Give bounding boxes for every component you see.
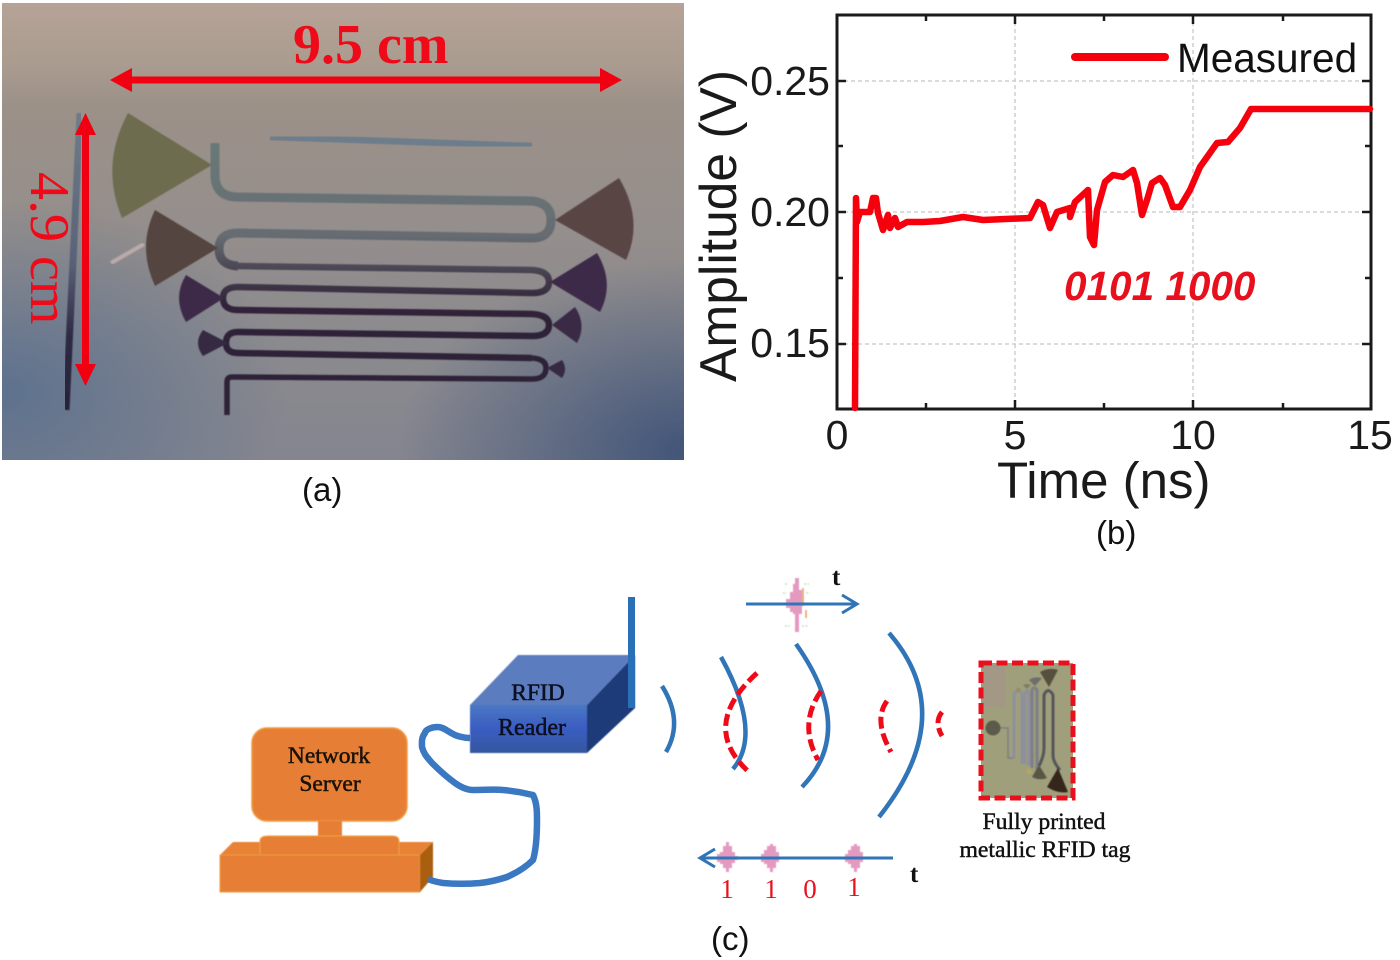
RFID reader box (470, 655, 635, 753)
reader label: RFID (511, 680, 565, 706)
server label: Network (288, 743, 370, 769)
x axis tick labels: 5 (1004, 412, 1026, 458)
label: 9.5 cm: 9.5 cm (293, 14, 449, 76)
plot frame and ticks (837, 15, 1371, 409)
antenna (628, 597, 635, 708)
legend: Measured (1177, 35, 1357, 81)
miniature fans (986, 669, 1068, 792)
miniature tag traces (1000, 688, 1060, 770)
x axis tick labels: 10 (1170, 412, 1216, 458)
caption c: (c) (711, 920, 749, 957)
panel c: RFID system diagram (220, 564, 1131, 904)
arrow: 4.9 cm height (75, 113, 96, 386)
outgoing blue wavefronts (662, 633, 922, 817)
time label top: t (832, 564, 841, 591)
tag caption: metallic RFID tag (959, 837, 1131, 863)
reader label: Reader (498, 715, 566, 741)
response bits (720, 872, 861, 904)
y axis tick labels: 0.15 (750, 320, 830, 366)
tag caption (959, 809, 1131, 863)
response pulse axis (700, 842, 893, 872)
caption a: (a) (302, 471, 342, 508)
photo background (2, 3, 684, 460)
response bits: 0 (803, 874, 817, 904)
plot gridlines (837, 15, 1371, 408)
bit code annotation: 0101 1000 (1064, 263, 1256, 309)
server label: Server (299, 771, 361, 797)
x axis tick labels: 15 (1347, 412, 1393, 458)
y axis tick labels: 0.20 (750, 189, 830, 235)
interrogation pulse (783, 578, 810, 632)
reader label (498, 680, 566, 741)
y axis tick labels: 0.25 (750, 58, 830, 104)
time label bottom: t (910, 861, 919, 888)
radial stub fans (112, 113, 634, 378)
top bar strip (270, 137, 532, 146)
response pulses (717, 842, 863, 872)
panel a: photo of printed tag (2, 3, 684, 460)
cable (422, 727, 537, 884)
reflected red wavefronts (726, 673, 942, 773)
tag caption: Fully printed (982, 809, 1106, 835)
response bits: 1 (720, 874, 734, 904)
server label (288, 743, 370, 797)
arrow: 9.5 cm width (110, 68, 622, 92)
scratch mark (111, 244, 144, 263)
panel b: amplitude chart (689, 15, 1393, 509)
caption b: (b) (1096, 514, 1136, 551)
response bits: 1 (847, 872, 861, 902)
tag illustration (981, 663, 1073, 798)
response bits: 1 (764, 874, 778, 904)
meander transmission line (215, 143, 551, 415)
interrogation pulse axis (746, 578, 857, 632)
y axis title: Amplitude (V) (689, 70, 747, 382)
left ground strip (66, 113, 80, 410)
x axis tick labels (826, 412, 1393, 458)
tag dashed frame (981, 663, 1073, 798)
label: 4.9 cm: 4.9 cm (18, 172, 80, 324)
x axis title: Time (ns) (997, 452, 1210, 509)
y axis tick labels (750, 58, 830, 366)
network server computer (220, 728, 433, 892)
measured curve (855, 109, 1370, 408)
x axis tick labels: 0 (826, 412, 848, 458)
